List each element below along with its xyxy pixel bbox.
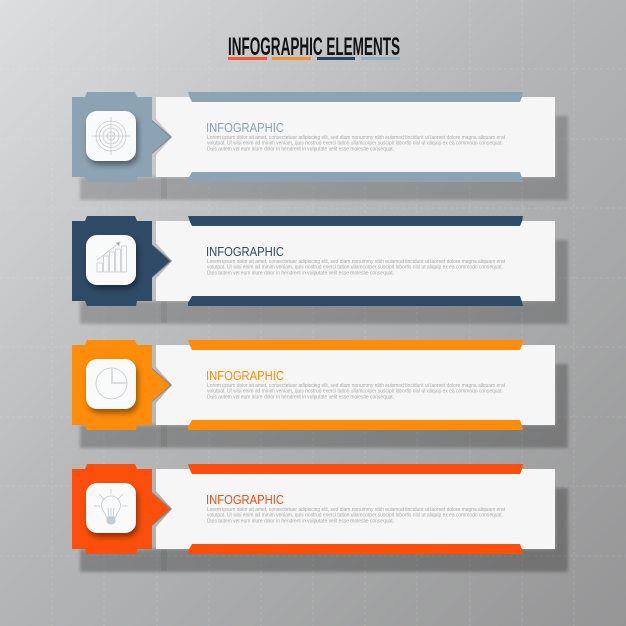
heading: INFOGRAPHIC (206, 244, 284, 259)
white content panel (156, 469, 555, 549)
body text (207, 259, 506, 276)
body text (207, 135, 506, 152)
colour square with arrow (72, 469, 170, 549)
icon: target (92, 117, 130, 155)
body text: volutpat. Ut wisi enim ad minim veniam, quis nostrud exerci tation ullamcorper suscipit lobortis nisl ut aliquip ex ea commodo consequat. (207, 140, 503, 146)
arrow shadow (152, 244, 172, 278)
body text: Lorem ipsum dolor sit amet, consectetuer adipiscing elit, sed diam nonummy nibh euismod tincidunt ut laoreet dolore magna aliquam erat (207, 259, 506, 265)
colour square with arrow (72, 97, 170, 177)
arrow shadow (152, 120, 172, 154)
icon tile (86, 111, 136, 161)
panel: row 2 navy (72, 216, 568, 324)
arrow shadow (152, 368, 172, 402)
body text: volutpat. Ut wisi enim ad minim veniam, quis nostrud exerci tation ullamcorper suscipit lobortis nisl ut aliquip ex ea commodo consequat. (207, 264, 503, 270)
icon: light bulb (94, 489, 128, 524)
top and bottom bands (188, 216, 523, 306)
panel shadow (80, 364, 568, 448)
body text: volutpat. Ut wisi enim ad minim veniam, quis nostrud exerci tation ullamcorper suscipit lobortis nisl ut aliquip ex ea commodo consequat. (207, 388, 503, 394)
icon tile (86, 235, 136, 285)
top and bottom tabs (85, 464, 137, 554)
body text: Duis autem vel eum iriure dolor in hendrerit in vulputate velit esse molestie consequat. (207, 270, 394, 276)
heading: INFOGRAPHIC (206, 120, 284, 135)
body text: Lorem ipsum dolor sit amet, consectetuer adipiscing elit, sed diam nonummy nibh euismod tincidunt ut laoreet dolore magna aliquam erat (207, 135, 506, 141)
body text: Duis autem vel eum iriure dolor in hendrerit in vulputate velit esse molestie consequat. (207, 518, 394, 524)
top and bottom bands (188, 92, 523, 182)
panel shadow (80, 116, 568, 200)
arrow shadow (152, 492, 172, 526)
body text (207, 383, 506, 400)
body text (207, 507, 506, 524)
top and bottom tabs (85, 340, 137, 430)
icon tile (86, 359, 136, 409)
panel shadow (80, 488, 568, 572)
top and bottom tabs (85, 216, 137, 306)
top and bottom bands (188, 464, 523, 554)
title colour underlines (228, 57, 400, 60)
panel: row 1 blue-grey (72, 92, 568, 200)
heading: INFOGRAPHIC (206, 368, 284, 383)
icon: rising bar chart (97, 242, 126, 272)
colour square with arrow (72, 221, 170, 301)
body text: Lorem ipsum dolor sit amet, consectetuer adipiscing elit, sed diam nonummy nibh euismod tincidunt ut laoreet dolore magna aliquam erat (207, 383, 506, 389)
body text: Duis autem vel eum iriure dolor in hendrerit in vulputate velit esse molestie consequat. (207, 146, 394, 152)
title: INFOGRAPHIC ELEMENTS (228, 33, 400, 61)
panel: row 4 red (72, 464, 568, 572)
white content panel (156, 345, 555, 425)
panel shadow (80, 240, 568, 324)
body text: Lorem ipsum dolor sit amet, consectetuer adipiscing elit, sed diam nonummy nibh euismod tincidunt ut laoreet dolore magna aliquam erat (207, 507, 506, 513)
top and bottom tabs (85, 92, 137, 182)
white content panel (156, 221, 555, 301)
panel: row 3 orange (72, 340, 568, 448)
icon tile (86, 483, 136, 533)
white content panel (156, 97, 555, 177)
icon: pie chart (96, 368, 127, 399)
top and bottom bands (188, 340, 523, 430)
colour square with arrow (72, 345, 170, 425)
body text: Duis autem vel eum iriure dolor in hendrerit in vulputate velit esse molestie consequat. (207, 394, 394, 400)
heading: INFOGRAPHIC (206, 492, 284, 507)
body text: volutpat. Ut wisi enim ad minim veniam, quis nostrud exerci tation ullamcorper suscipit lobortis nisl ut aliquip ex ea commodo consequat. (207, 512, 503, 518)
